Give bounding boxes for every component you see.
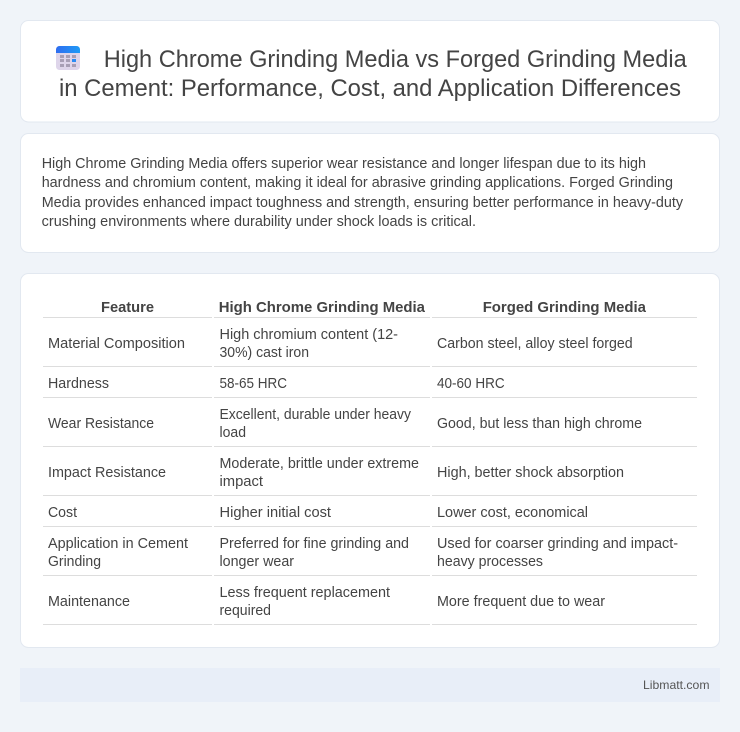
row: application in cement grinding: Application in Cement (48, 536, 188, 552)
row: material composition: Material Composition (48, 336, 185, 352)
row: cost: Cost (48, 505, 77, 521)
footer (20, 668, 720, 702)
row: application in cement grinding: Preferred for fine grinding and (220, 536, 409, 552)
row: wear resistance: Wear Resistance (48, 416, 154, 432)
row: maintenance: Less frequent replacement (220, 585, 390, 601)
table header: Feature (101, 299, 154, 316)
panel: summary paragraph: High Chrome Grinding Media offers superior wear resistance and longer lifespan due to its high (42, 156, 646, 172)
row: application in cement grinding (43, 536, 697, 576)
row: material composition (43, 327, 697, 367)
heading (59, 46, 687, 102)
panel: summary paragraph: hardness and chromium content, making it ideal for abrasive grinding applications. Forged Grinding (42, 175, 673, 191)
panel: summary paragraph: crushing environments where durability under shock loads is critical. (42, 214, 476, 230)
panel: title (20, 20, 720, 122)
row: maintenance: Maintenance (48, 594, 130, 610)
heading: High Chrome Grinding Media vs Forged Grinding Media (104, 46, 687, 73)
row: impact resistance: Moderate, brittle under extreme (220, 456, 419, 472)
row: wear resistance: Good, but less than high chrome (437, 416, 642, 432)
table header (43, 299, 697, 318)
row: hardness (43, 376, 697, 398)
panel: summary paragraph: Media provides enhanced impact toughness and strength, ensuring better performance in heavy-duty (42, 195, 684, 211)
row: material composition: Carbon steel, alloy steel forged (437, 336, 633, 352)
row: impact resistance: impact (220, 474, 263, 490)
row: application in cement grinding: Grinding (48, 554, 101, 570)
row: maintenance: More frequent due to wear (437, 594, 605, 610)
row: hardness: Hardness (48, 376, 109, 392)
row: wear resistance: load (220, 425, 246, 441)
row: application in cement grinding: heavy processes (437, 554, 543, 570)
row: impact resistance: High, better shock absorption (437, 465, 624, 481)
table header: Forged Grinding Media (483, 299, 647, 316)
row: maintenance (43, 585, 697, 625)
row: material composition: High chromium content (12- (220, 327, 398, 343)
footer: Libmatt.com (643, 678, 710, 692)
row: material composition: 30%) cast iron (220, 345, 309, 361)
row: cost: Lower cost, economical (437, 505, 588, 521)
row: wear resistance: Excellent, durable under heavy (220, 407, 412, 423)
row: application in cement grinding: longer wear (220, 554, 294, 570)
row: hardness: 58-65 HRC (220, 376, 287, 392)
row: impact resistance: Impact Resistance (48, 465, 166, 481)
row: hardness: 40-60 HRC (437, 376, 505, 392)
row: cost: Higher initial cost (220, 505, 331, 521)
row: wear resistance (43, 407, 697, 447)
panel: summary paragraph (20, 134, 720, 252)
table header: High Chrome Grinding Media (219, 299, 426, 316)
row: impact resistance (43, 456, 697, 496)
heading: in Cement: Performance, Cost, and Application Differences (59, 75, 681, 102)
icon: calendar (56, 46, 80, 70)
row: cost (43, 505, 697, 527)
row: maintenance: required (220, 603, 271, 619)
panel: comparison table (20, 274, 720, 648)
row: application in cement grinding: Used for coarser grinding and impact- (437, 536, 678, 552)
